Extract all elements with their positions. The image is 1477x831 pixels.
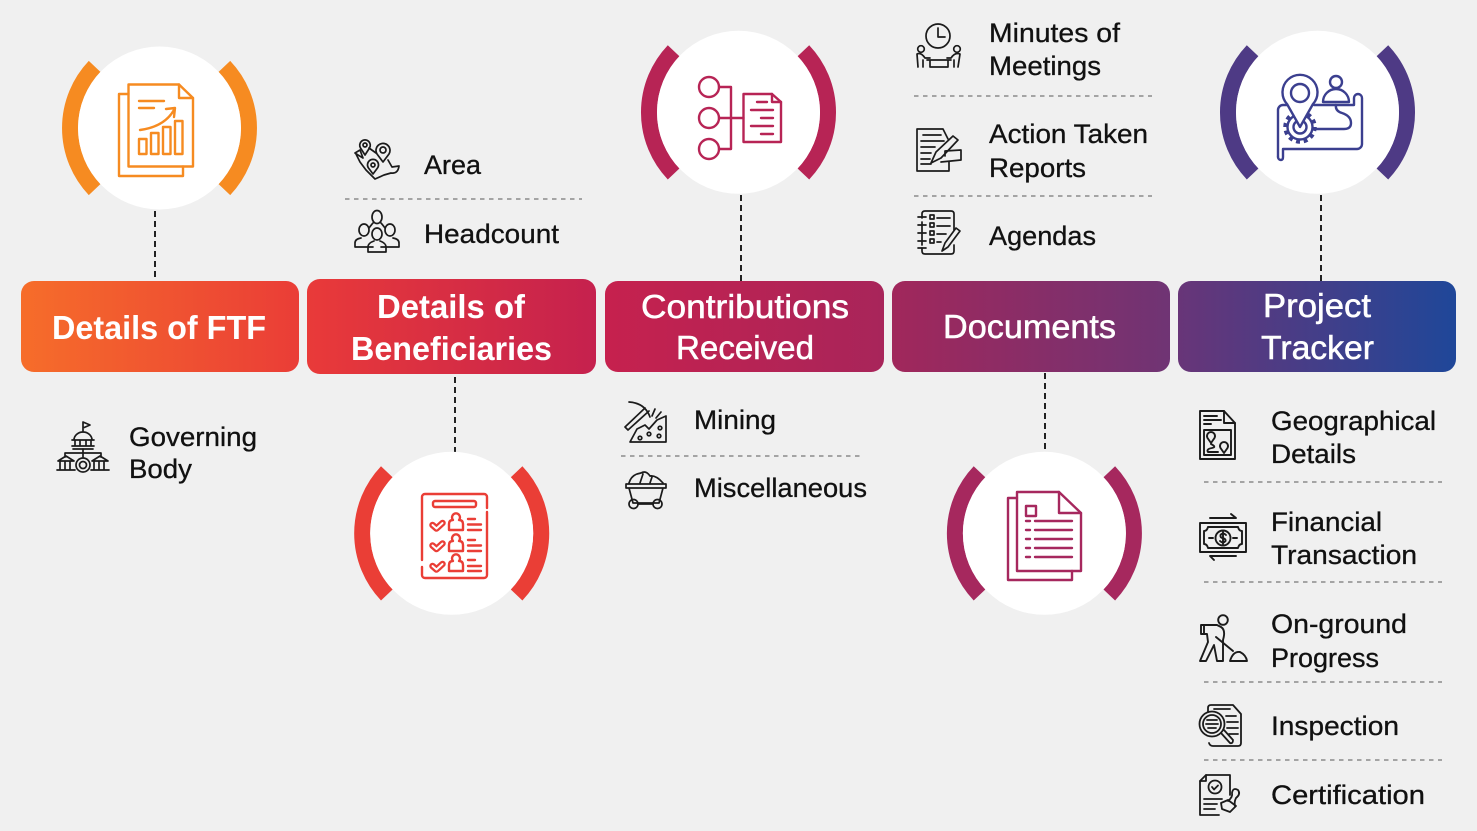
divider (914, 95, 1152, 97)
item: Area (355, 140, 481, 180)
icon: document with route map (1200, 411, 1235, 459)
divider (914, 195, 1152, 197)
icon: mining cart (626, 472, 666, 508)
connector: Documents (1044, 373, 1046, 452)
header: Details of Beneficiaries (307, 279, 596, 374)
header: Details of FTF (21, 281, 299, 372)
badge: Details of Beneficiaries (362, 452, 541, 615)
divider (1204, 759, 1442, 761)
header: Project Tracker: Tracker (1261, 329, 1374, 366)
item: Financial Transaction: Financial (1271, 507, 1382, 537)
header: Contributions Received: Contributions (641, 288, 849, 325)
header: Documents: Documents (943, 308, 1116, 345)
item: On-ground Progress: On-ground (1271, 609, 1407, 639)
icon: certificate with stamp (1200, 775, 1239, 815)
item: Action Taken Reports: Reports (989, 153, 1086, 183)
item: Geographical Details (1200, 406, 1436, 469)
badge: Documents (955, 452, 1134, 615)
header: Project Tracker: Project (1263, 287, 1371, 324)
icon: banknote with exchange arrows (1200, 514, 1246, 560)
icon: spiral notepad with pen (918, 211, 960, 254)
header: Project Tracker (1178, 281, 1456, 372)
item: Inspection: Inspection (1271, 711, 1399, 741)
icon: beneficiary checklist (422, 494, 487, 578)
icon: report with rising bar chart (119, 84, 193, 176)
item: Financial Transaction (1200, 507, 1417, 570)
icon: pickaxe and rock (625, 402, 666, 442)
icon: group of people (355, 210, 399, 252)
item: Minutes of Meetings: Minutes of (989, 18, 1121, 48)
item: Action Taken Reports (917, 119, 1148, 183)
divider (1204, 581, 1442, 583)
item: Minutes of Meetings: Meetings (989, 51, 1101, 81)
item: Mining: Mining (694, 405, 776, 435)
item: Agendas: Agendas (989, 221, 1096, 251)
item: Miscellaneous (626, 472, 867, 508)
icon: stacked documents (1008, 492, 1081, 580)
item: Governing Body: Body (129, 454, 193, 484)
header: Contributions Received: Received (676, 329, 814, 366)
badge: Contributions Received (649, 31, 828, 194)
item: Area: Area (424, 150, 481, 180)
icon: worker shovelling (1200, 615, 1247, 661)
badge: Details of FTF (70, 46, 249, 210)
item: Miscellaneous: Miscellaneous (694, 473, 867, 503)
item: On-ground Progress: Progress (1271, 643, 1379, 673)
connector: Details of Beneficiaries (454, 377, 456, 452)
icon: map with location pin, gear and person (1278, 75, 1362, 160)
header: Details of Beneficiaries: Beneficiaries (351, 330, 552, 367)
connector: Details of FTF (154, 211, 156, 280)
item: Inspection (1200, 705, 1399, 746)
item: Agendas (918, 211, 1096, 254)
icon: document under magnifier (1200, 705, 1241, 746)
item: On-ground Progress (1200, 609, 1407, 673)
icon: map with pins (355, 140, 399, 179)
item: Governing Body: Governing (129, 422, 257, 452)
item: Headcount (355, 210, 560, 252)
divider (621, 455, 860, 457)
item: Governing Body (57, 422, 257, 484)
icon: governing institutions (57, 422, 109, 472)
badge: Project Tracker (1228, 31, 1407, 194)
header: Details of Beneficiaries: Details of (377, 288, 526, 325)
connector: Project Tracker (1320, 195, 1322, 281)
item: Certification: Certification (1271, 780, 1425, 810)
item: Financial Transaction: Transaction (1271, 540, 1417, 570)
header: Details of FTF: Details of FTF (52, 309, 266, 346)
item: Mining (625, 402, 776, 442)
icon: meeting with clock (917, 24, 960, 67)
item: Geographical Details: Geographical (1271, 406, 1436, 436)
item: Action Taken Reports: Action Taken (989, 119, 1148, 149)
divider (345, 198, 582, 200)
connector: Contributions Received (740, 195, 742, 281)
header: Contributions Received (605, 281, 884, 372)
item: Geographical Details: Details (1271, 439, 1356, 469)
divider (1204, 681, 1442, 683)
item: Minutes of Meetings (917, 18, 1121, 81)
item: Certification (1200, 775, 1425, 815)
icon: writing a report (917, 129, 961, 171)
icon: contribution sources to document (699, 77, 781, 159)
header: Documents (892, 281, 1170, 372)
item: Headcount: Headcount (424, 219, 560, 249)
divider (1204, 481, 1442, 483)
